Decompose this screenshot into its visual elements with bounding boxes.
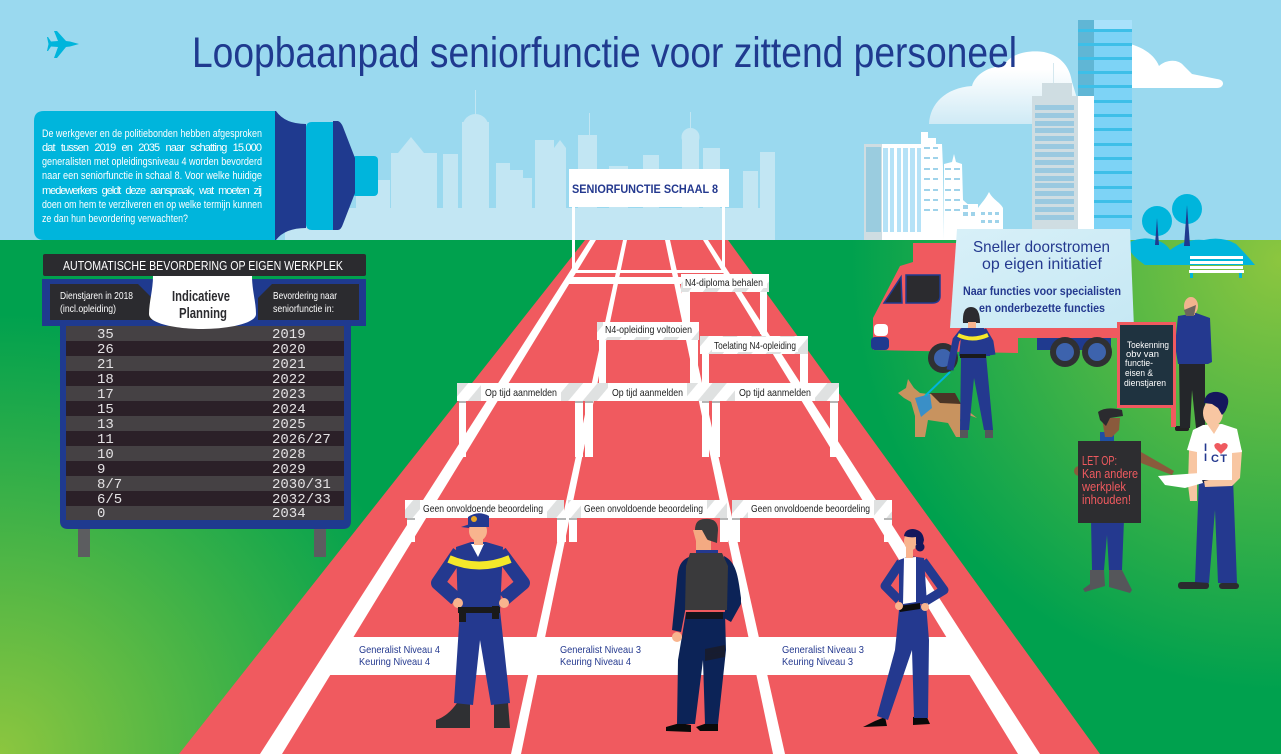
board legs — [78, 528, 326, 557]
promotion year column: 2020 — [272, 342, 306, 358]
start labels: Generalist Niveau 3 — [560, 644, 641, 656]
hurdle: N4-opleiding voltooien — [597, 322, 699, 384]
hurdles: Op tijd aanmelden: Op tijd aanmelden — [739, 387, 811, 399]
start labels: Keuring Niveau 4 — [359, 656, 430, 668]
hurdle: Toelating N4-opleiding — [700, 336, 808, 384]
bottle neck and cap — [272, 111, 378, 240]
years of service column: 0 — [97, 506, 105, 522]
bottle intro panel — [34, 111, 378, 240]
hurdles: Geen onvoldoende beoordeling: Geen onvoldoende beoordeling — [584, 503, 703, 515]
years of service column: 21 — [97, 357, 114, 373]
warning board: werkplek — [1081, 480, 1127, 494]
truck — [871, 243, 1120, 373]
finish banner — [569, 169, 729, 271]
intro text: ze dan hun bevordering verwachten? — [42, 213, 188, 225]
figure: policewoman with dog — [950, 307, 993, 438]
running track — [179, 240, 1100, 754]
years of service column: 18 — [97, 372, 114, 388]
years of service column — [97, 327, 122, 522]
scoreboard heading: AUTOMATISCHE BEVORDERING OP EIGEN WERKPLEK — [63, 259, 344, 273]
indicatieve planning badge: Indicatieve — [172, 288, 230, 305]
years of service column: 9 — [97, 462, 105, 478]
truck sign — [950, 229, 1134, 328]
years of service column: 17 — [97, 387, 114, 403]
left column header: (incl.opleiding) — [60, 303, 116, 315]
hurdle: N4-diploma behalen — [681, 274, 769, 334]
intro text: De werkgever en de politiebonden hebben afgesproken — [42, 128, 262, 140]
warning board: LET OP: — [1082, 454, 1117, 468]
sky background — [0, 0, 1281, 240]
years of service column: 6/5 — [97, 492, 122, 508]
warning board: inhouden! — [1082, 493, 1131, 507]
promotion year column: 2025 — [272, 417, 306, 433]
truck sign: op eigen initiatief — [982, 256, 1103, 273]
hurdle: Toelating N4-opleiding: Toelating N4-opleiding — [714, 340, 796, 352]
grey office building — [1032, 63, 1094, 230]
chalkboard: Toekenning — [1127, 340, 1169, 351]
promotion year column — [272, 327, 331, 522]
bottle body — [34, 111, 275, 240]
start labels: Generalist Niveau 3 — [782, 644, 864, 656]
start band — [318, 637, 985, 675]
indicatieve planning badge — [149, 276, 256, 329]
finish lines — [564, 270, 739, 284]
chalkboard: obv van — [1126, 349, 1159, 360]
intro text: medewerkers geldt deze aanspraak, wat moeten zij — [42, 185, 262, 197]
start labels: Generalist Niveau 4 — [359, 644, 440, 656]
years of service column: 15 — [97, 402, 114, 418]
left column header — [50, 284, 152, 320]
skyline left — [285, 90, 775, 240]
promotion year column: 2019 — [272, 327, 306, 343]
promotion year column: 2022 — [272, 372, 306, 388]
right column header — [258, 284, 359, 320]
promotion year column: 2021 — [272, 357, 306, 373]
promotion year column: 2028 — [272, 447, 306, 463]
start labels: Keuring Niveau 4 — [560, 656, 631, 668]
left column header: Dienstjaren in 2018 — [60, 290, 133, 302]
intro text: naar een seniorfunctie in schaal 8. Voor welke huidige — [42, 170, 262, 182]
ICT shirt text: I — [1204, 452, 1207, 464]
intro text: generalisten met opleidingsniveau 4 worden bevorderd — [42, 156, 262, 168]
grass field — [0, 240, 1281, 754]
truck sign: en onderbezette functies — [979, 303, 1105, 315]
park bench — [1189, 256, 1244, 278]
warning board — [1078, 441, 1141, 523]
figure: marechaussee officer — [436, 513, 523, 728]
chalkboard: functie- — [1125, 358, 1153, 369]
hurdles: Geen onvoldoende beoordeling: Geen onvoldoende beoordeling — [751, 503, 870, 515]
cloud right — [1130, 44, 1223, 88]
board frame — [60, 320, 351, 529]
hurdles: Geen onvoldoende beoordeling — [405, 500, 892, 542]
hurdles: Op tijd aanmelden — [457, 383, 839, 457]
years of service column: 13 — [97, 417, 114, 433]
years of service column: 8/7 — [97, 477, 122, 493]
intro text: dat tussen 2019 en 2035 naar schatting 15.000 — [42, 142, 262, 154]
cloud left — [929, 51, 1085, 124]
promotion year column: 2029 — [272, 462, 306, 478]
hurdle: N4-opleiding voltooien: N4-opleiding voltooien — [605, 324, 692, 336]
chalkboard — [1117, 322, 1176, 427]
city buildings right — [864, 132, 1003, 240]
promotion year column: 2032/33 — [272, 492, 331, 508]
figure: woman in blue suit — [863, 529, 944, 727]
header band — [42, 279, 366, 326]
figure: bald man — [1175, 297, 1212, 431]
years of service column: 26 — [97, 342, 114, 358]
title: Loopbaanpad seniorfunctie voor zittend personeel — [192, 29, 1017, 77]
tree group and bushes — [1130, 194, 1255, 265]
scoreboard heading — [43, 254, 366, 276]
lane lines — [260, 240, 1040, 754]
right column header: Bevordering naar — [273, 290, 337, 302]
icon: airplane — [47, 31, 79, 58]
years of service column: 35 — [97, 327, 114, 343]
figure: officer in vest — [666, 519, 741, 732]
figure: ICT man — [1158, 392, 1242, 589]
intro text: doen om hem te verzilveren en op welke termijn kunnen — [42, 199, 262, 211]
truck sign: Naar functies voor specialisten — [963, 286, 1121, 298]
chalkboard: dienstjaren — [1124, 378, 1166, 389]
hurdles: Op tijd aanmelden: Op tijd aanmelden — [612, 387, 683, 399]
start labels — [359, 644, 864, 668]
promotion year column: 2026/27 — [272, 432, 331, 448]
promotion year column: 2034 — [272, 506, 306, 522]
ICT shirt text: I — [1204, 442, 1207, 454]
years of service column: 10 — [97, 447, 114, 463]
promotion year column: 2023 — [272, 387, 306, 403]
promotion year column: 2024 — [272, 402, 306, 418]
ICT shirt text — [1204, 442, 1228, 465]
hurdles: Geen onvoldoende beoordeling: Geen onvoldoende beoordeling — [423, 503, 543, 515]
figure: police dog — [898, 372, 977, 437]
right column header: seniorfunctie in: — [273, 303, 334, 315]
board rows — [66, 326, 344, 520]
intro text — [42, 128, 262, 225]
hurdles: Op tijd aanmelden: Op tijd aanmelden — [485, 387, 557, 399]
finish banner: SENIORFUNCTIE SCHAAL 8 — [572, 182, 718, 196]
indicatieve planning badge: Planning — [179, 305, 227, 322]
warning board: Kan andere — [1082, 467, 1138, 481]
ICT shirt text: CT — [1211, 453, 1227, 465]
promotion year column: 2030/31 — [272, 477, 331, 493]
chalkboard: eisen & — [1125, 368, 1154, 379]
truck sign: Sneller doorstromen — [973, 239, 1110, 256]
tall glass tower — [1078, 20, 1132, 230]
start labels: Keuring Niveau 3 — [782, 656, 853, 668]
scoreboard panel — [42, 254, 366, 557]
figure: man with warning board — [1074, 408, 1174, 593]
hurdle: N4-diploma behalen: N4-diploma behalen — [685, 277, 763, 289]
years of service column: 11 — [97, 432, 114, 448]
